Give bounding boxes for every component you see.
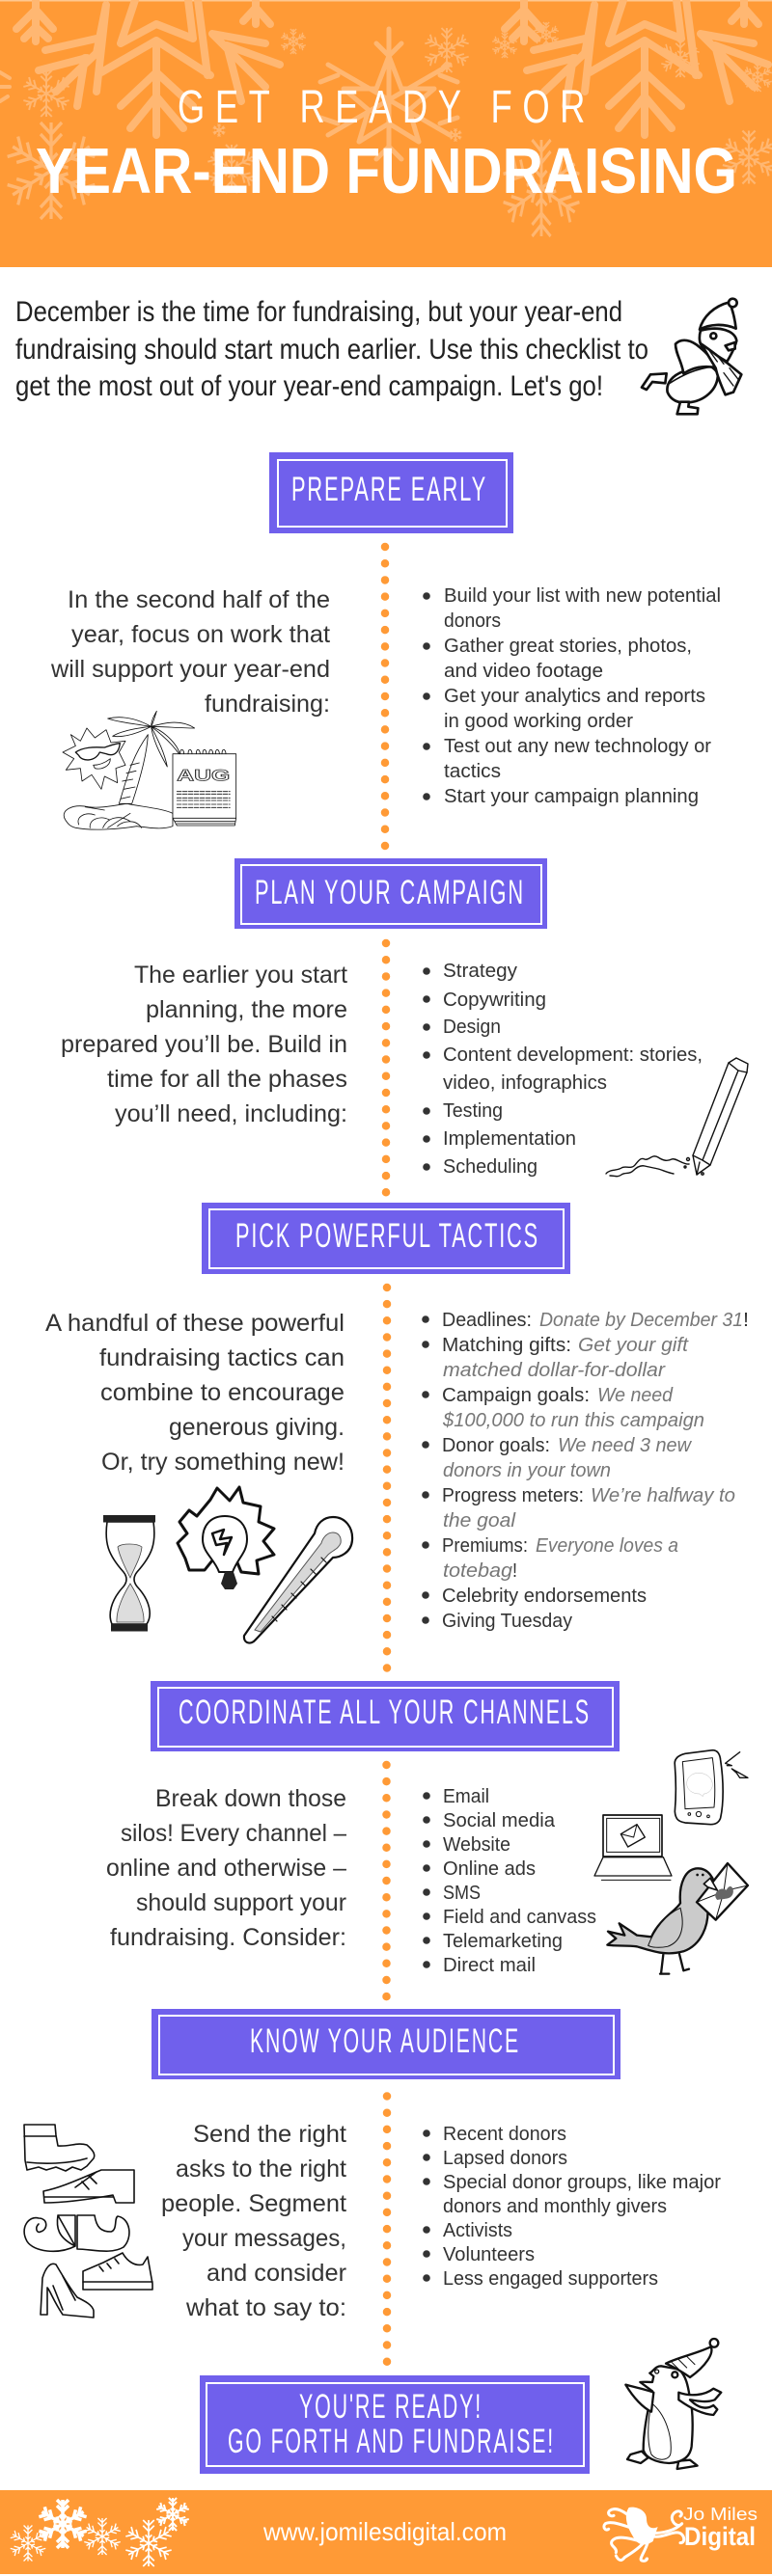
checklist: pick powerful tactics: Deadlines: — [442, 1310, 532, 1331]
elf shoes — [24, 2215, 75, 2251]
left text: know your audience: what to say to: — [185, 2294, 346, 2321]
icon: light bulb idea — [178, 1487, 274, 1589]
header panel — [0, 0, 772, 267]
checklist: prepare early: tactics — [444, 761, 501, 782]
checklist: audience — [423, 2124, 721, 2290]
checklist: pick powerful tactics: Celebrity endorsements — [442, 1586, 647, 1607]
left text: plan your campaign: you’ll need, including: — [115, 1100, 347, 1127]
checklist: pick powerful tactics: We’re halfway to — [591, 1485, 735, 1506]
left text: pick powerful tactics: Or, try something new! — [101, 1449, 345, 1476]
checklist: pick powerful tactics: Donor goals: — [442, 1435, 550, 1456]
left text: prepare early — [50, 586, 330, 718]
left text: coordinate channels: fundraising. Consider: — [110, 1924, 346, 1951]
left text: know your audience — [161, 2121, 346, 2321]
checklist: channels: Direct mail — [443, 1955, 536, 1976]
checklist: plan your campaign: Design — [443, 1017, 501, 1038]
left text: pick powerful tactics: A handful of these powerful — [45, 1310, 345, 1337]
left text: prepare early: fundraising: — [205, 691, 330, 718]
checklist: pick powerful tactics: Giving Tuesday — [442, 1611, 572, 1632]
section banner: plan your campaign — [234, 858, 547, 929]
footer panel — [0, 2490, 772, 2574]
checklist: prepare early: and video footage — [444, 661, 603, 682]
section banner: pick powerful tactics: PICK POWERFUL TACTICS — [235, 1217, 539, 1255]
closing banner — [200, 2375, 590, 2474]
checklist: audience: Volunteers — [443, 2244, 535, 2265]
logo: Jo Miles Digital octopus: Jo Miles — [683, 2505, 758, 2524]
section banner: coordinate all your channels — [151, 1681, 620, 1751]
checklist: prepare early: Start your campaign planning — [444, 786, 699, 807]
checklist: prepare early: Get your analytics and reports — [444, 686, 705, 707]
icon: assorted shoes — [24, 2125, 152, 2318]
icon: thermometer — [244, 1517, 352, 1642]
checklist: pick powerful tactics: Get your gift — [578, 1335, 690, 1356]
closing banner: YOU'RE READY! — [299, 2388, 482, 2426]
checklist: pick powerful tactics: $100,000 to run this campaign — [442, 1410, 704, 1431]
boot — [24, 2125, 95, 2171]
icon: penguin with hat and scarf — [642, 299, 741, 414]
section banner: plan your campaign: PLAN YOUR CAMPAIGN — [255, 874, 525, 911]
checklist: channels: SMS — [443, 1883, 481, 1904]
section banner: pick powerful tactics — [202, 1203, 570, 1274]
bird — [607, 1863, 748, 1974]
high heel — [41, 2264, 94, 2318]
closing banner: GO FORTH AND FUNDRAISE! — [228, 2423, 555, 2460]
checklist: plan your campaign: Strategy — [443, 961, 517, 982]
logo: Jo Miles Digital octopus — [604, 2505, 758, 2561]
left text: prepare early: year, focus on work that — [71, 621, 330, 648]
icon: phone, laptop and bird with envelope — [594, 1750, 748, 1974]
left text: pick powerful tactics: generous giving. — [169, 1414, 345, 1441]
left text: coordinate channels: should support your — [136, 1889, 346, 1916]
dotted connector 4 — [382, 1765, 391, 1997]
left text: pick powerful tactics: fundraising tactics can — [99, 1344, 345, 1371]
logo: Jo Miles Digital octopus: Digital — [684, 2522, 756, 2551]
laptop — [594, 1815, 672, 1880]
checklist: audience: Recent donors — [443, 2124, 566, 2145]
checklist: pick powerful tactics: Premiums: — [442, 1535, 528, 1557]
checklist: pick powerful tactics: We need — [597, 1385, 674, 1406]
footer snowflakes — [11, 2498, 189, 2566]
left text: prepare early: In the second half of the — [68, 586, 330, 613]
checklist: pick powerful tactics: ! — [743, 1310, 749, 1331]
icon: sun, palm tree and August calendar: AUG — [177, 766, 230, 784]
checklist: channels: Website — [443, 1834, 510, 1856]
checklist: plan your campaign: video, infographics — [443, 1072, 607, 1094]
left text: know your audience: and consider — [207, 2260, 346, 2287]
dotted connector 5 — [383, 2097, 391, 2363]
phone — [675, 1750, 748, 1825]
icon: cheering penguin — [625, 2339, 721, 2469]
left text: pick powerful tactics: combine to encourage — [100, 1379, 345, 1406]
left text: plan your campaign: time for all the phases — [107, 1066, 347, 1093]
dotted connector 3 — [383, 1288, 391, 1668]
checklist: audience: Special donor groups, like major — [443, 2172, 721, 2193]
left text: coordinate channels: online and otherwise – — [106, 1855, 346, 1882]
checklist: channels: Telemarketing — [443, 1931, 563, 1952]
intro text: December is the time for fundraising, but your year-end — [15, 296, 622, 328]
left text: know your audience: asks to the right — [176, 2156, 346, 2183]
left text: prepare early: will support your year-end — [50, 656, 330, 683]
oxford shoe — [43, 2170, 134, 2203]
section banner: prepare early: PREPARE EARLY — [291, 471, 487, 508]
checklist: plan your campaign: Testing — [443, 1100, 503, 1122]
checklist: pick powerful tactics: Matching gifts: — [442, 1335, 571, 1356]
checklist: channels — [423, 1786, 596, 1976]
left text: plan your campaign: planning, the more — [146, 996, 347, 1023]
left text: plan your campaign: The earlier you start — [134, 962, 347, 989]
left text: plan your campaign — [61, 962, 347, 1127]
checklist: plan your campaign: Copywriting — [443, 990, 546, 1011]
left text: know your audience: your messages, — [182, 2225, 346, 2252]
checklist: plan your campaign — [423, 961, 703, 1178]
left text: coordinate channels: silos! Every channel – — [121, 1820, 346, 1847]
checklist: pick powerful tactics: Campaign goals: — [442, 1385, 590, 1406]
icon: hourglass — [103, 1515, 155, 1632]
checklist: plan your campaign: Content development: stories, — [443, 1044, 703, 1066]
header snowflakes — [0, 0, 772, 236]
checklist: channels: Email — [443, 1786, 489, 1807]
checklist: plan your campaign: Implementation — [443, 1128, 576, 1150]
checklist: pick powerful tactics: matched dollar-for-dollar — [443, 1360, 666, 1381]
checklist: pick powerful tactics: We need 3 new — [558, 1435, 693, 1456]
checklist: pick powerful tactics: the goal — [443, 1510, 516, 1532]
icon: sun, palm tree and August calendar — [63, 711, 236, 829]
dotted connector 2 — [382, 943, 390, 1193]
checklist: pick powerful tactics: Donate by December 31 — [539, 1310, 743, 1331]
checklist: channels: Social media — [443, 1810, 556, 1831]
section banner: prepare early — [269, 452, 513, 533]
intro text: get the most out of your year-end campaign. Let's go! — [15, 370, 603, 402]
section banner: know your audience — [152, 2009, 620, 2079]
left text: know your audience: people. Segment — [161, 2190, 346, 2217]
checklist: pick powerful tactics: totebag — [443, 1560, 512, 1582]
left text: plan your campaign: prepared you’ll be. Build in — [61, 1031, 347, 1058]
icon: pencil with scribble — [606, 1058, 748, 1177]
checklist: pick powerful tactics — [422, 1310, 749, 1632]
checklist: audience: Lapsed donors — [443, 2148, 567, 2169]
checklist: prepare early — [423, 585, 721, 807]
left text: coordinate channels — [106, 1785, 346, 1951]
left text: pick powerful tactics — [45, 1310, 345, 1476]
checklist: pick powerful tactics: donors in your town — [443, 1460, 611, 1481]
checklist: channels: Field and canvass — [443, 1907, 596, 1928]
left text: know your audience: Send the right — [193, 2121, 346, 2148]
checklist: prepare early: Test out any new technology or — [444, 736, 711, 757]
sneaker — [83, 2253, 152, 2290]
checklist: plan your campaign: Scheduling — [443, 1156, 538, 1178]
section banner: know your audience: KNOW YOUR AUDIENCE — [250, 2022, 520, 2060]
checklist: prepare early: donors — [444, 610, 501, 632]
checklist: prepare early: in good working order — [444, 711, 633, 732]
intro text — [15, 296, 648, 402]
checklist: audience: Activists — [443, 2220, 512, 2241]
checklist: channels: Online ads — [443, 1858, 536, 1880]
checklist: pick powerful tactics: ! — [512, 1560, 517, 1582]
left text: coordinate channels: Break down those — [155, 1785, 346, 1812]
checklist: prepare early: Gather great stories, photos, — [444, 636, 692, 657]
checklist: audience: donors and monthly givers — [443, 2196, 667, 2217]
checklist: prepare early: Build your list with new potential — [444, 585, 721, 607]
checklist: audience: Less engaged supporters — [443, 2268, 658, 2290]
dotted connector 1 — [381, 547, 389, 847]
checklist: pick powerful tactics: Everyone loves a — [536, 1535, 678, 1557]
checklist: pick powerful tactics: Progress meters: — [442, 1485, 584, 1506]
website url: www.jomilesdigital.com — [262, 2517, 507, 2546]
title line 1: GET READY FOR — [178, 82, 595, 133]
intro text: fundraising should start much earlier. Use this checklist to — [15, 334, 648, 366]
